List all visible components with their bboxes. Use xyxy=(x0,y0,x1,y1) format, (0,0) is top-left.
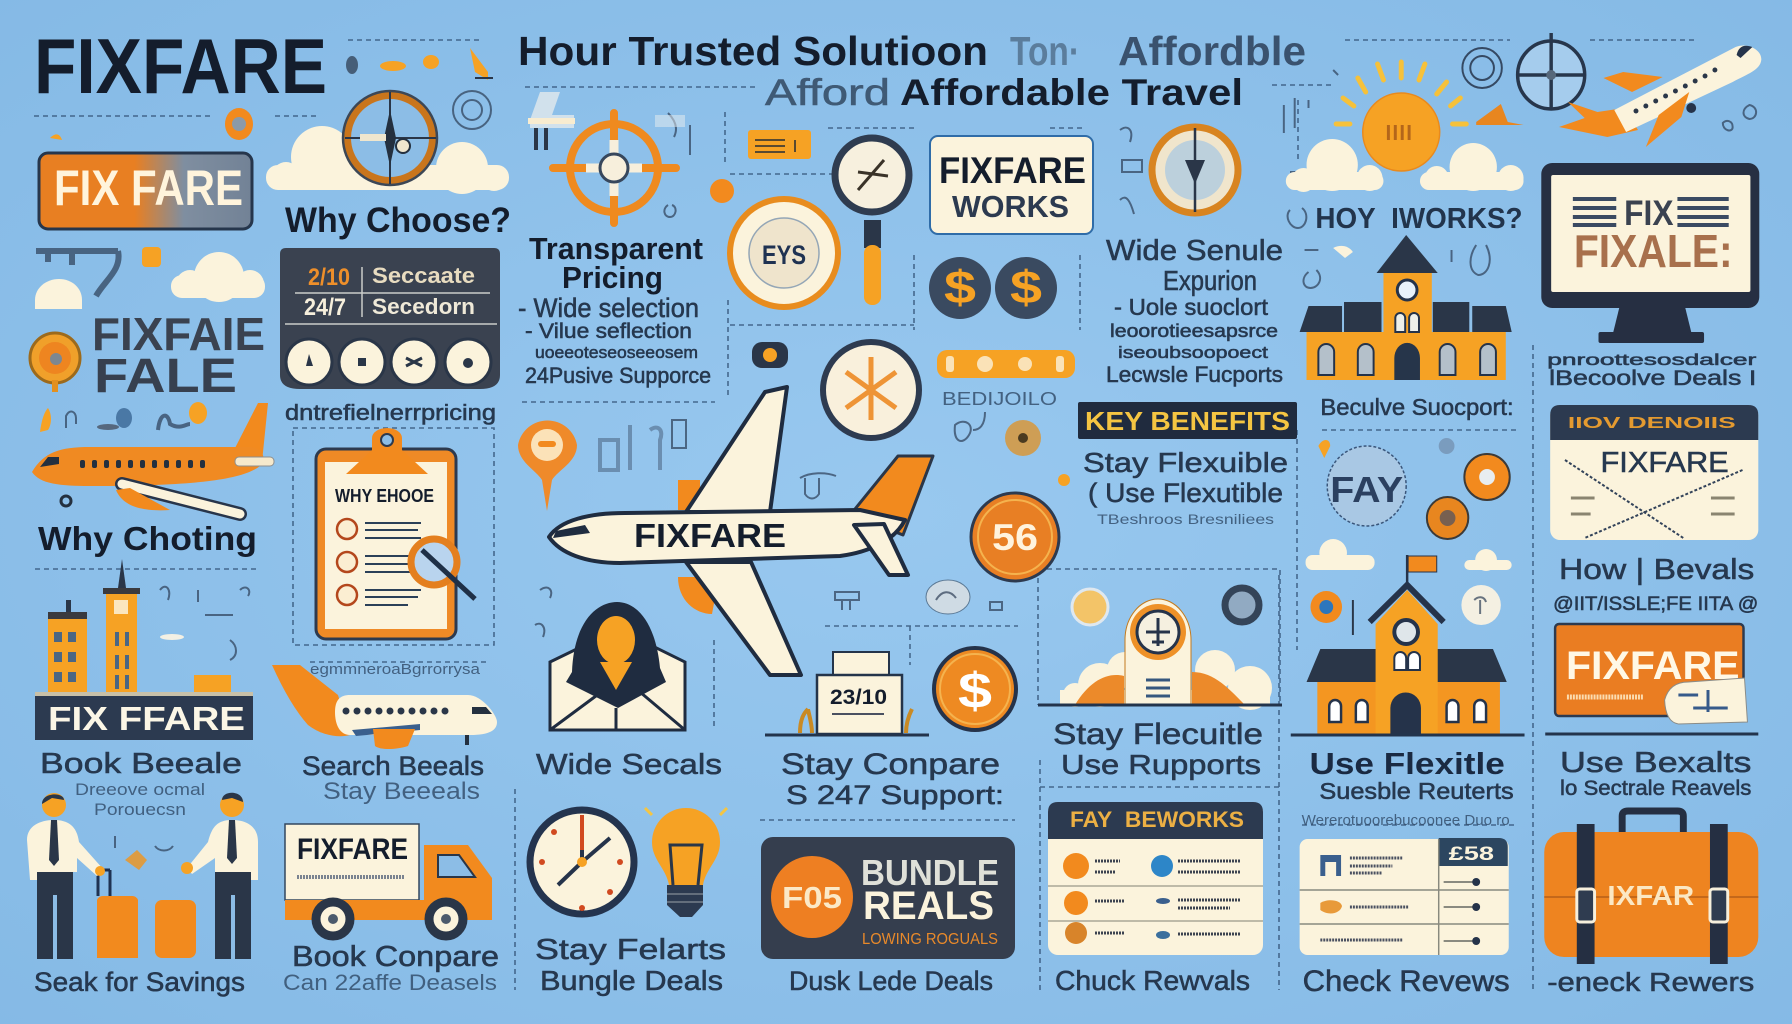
icons: dollar coins: $ xyxy=(1010,261,1042,313)
card: FAY BEWORKS table xyxy=(1048,802,1263,955)
label: Beculve Suocport: Beculve Suocport: xyxy=(1320,394,1514,420)
card: price table: £58 xyxy=(1449,843,1494,864)
badge: 56 coin xyxy=(971,493,1059,581)
airplane: top right xyxy=(1559,45,1761,147)
icon: magnifying glass xyxy=(835,138,909,305)
icon: orange ticket xyxy=(748,130,811,159)
text: Stay Flexuible: Stay Flexuible xyxy=(1083,447,1288,478)
illustration: school house xyxy=(1291,539,1525,735)
card: BUNDLE REALS: BUNDLE xyxy=(861,852,999,893)
panel: dark stats: Seccaate xyxy=(372,263,475,288)
cloud with compass xyxy=(266,91,509,194)
text: Stay Flecuitle: Stay Flecuitle xyxy=(1053,718,1263,751)
brand logo: FIXFARE: FIXFARE xyxy=(34,22,327,110)
text: Becoolve Deals xyxy=(1547,352,1757,390)
text: Search Beeals xyxy=(302,751,484,805)
panel: dark stats: 2/10 xyxy=(308,264,350,291)
text: Stay Felarts: Bungle Deals xyxy=(540,965,723,996)
icons: dollar coins xyxy=(929,257,1057,319)
icon: monitor xyxy=(1541,163,1759,343)
text: Wide Senule Expurion list: Wide Senule xyxy=(1106,235,1283,267)
central airplane: FIXFARE xyxy=(634,517,786,554)
text: Wide Senule Expurion list xyxy=(1106,235,1283,387)
text: Use Bexalts: lo Sectrale Reavels xyxy=(1560,777,1751,800)
text: Transparent Pricing list: - Vilue seflection xyxy=(525,320,692,343)
icon: orange suitcase: IXFAR xyxy=(1607,880,1694,911)
text: Book Conpare: Can 22affe Deasels xyxy=(283,970,497,995)
orange FIX FARE button: FIX FARE xyxy=(54,160,243,216)
illustration: town hall xyxy=(1300,235,1512,380)
badge: KEY BENEFITS: KEY BENEFITS xyxy=(1085,406,1290,436)
text: Use Flexible: Suesble Reuterts xyxy=(1319,778,1514,804)
text: How Bevals: How | Bevals xyxy=(1559,554,1754,586)
label: Seak for Savings: Seak for Savings xyxy=(34,967,245,997)
text: Use Flexible xyxy=(1302,746,1514,829)
left icon: towers and banner: FIX FFARE xyxy=(48,700,245,737)
icon: monitor: FIX xyxy=(1624,195,1673,233)
card: FIXFARE WORKS: WORKS xyxy=(952,189,1069,224)
text: Stay Flexuible: TBeshroos Bresniliees xyxy=(1097,511,1274,527)
left icon: towers and banner xyxy=(35,559,253,740)
label: FIXFAIE FALE: FIXFAIE xyxy=(92,308,265,360)
orange FIX FARE button xyxy=(39,153,252,229)
icon: sun with clouds xyxy=(1284,62,1524,192)
text: Stay Conpare: Stay Conpare xyxy=(781,748,1000,781)
label: FIXFAIE FALE xyxy=(92,308,265,403)
text: Becoolve Deals: lBecoolve Deals I xyxy=(1549,367,1756,390)
right columns group xyxy=(1284,33,1761,998)
panel: dark stats xyxy=(280,248,500,389)
text: Transparent Pricing list xyxy=(518,231,711,388)
text: Book Beeale xyxy=(40,748,242,819)
text: Book Conpare xyxy=(283,941,499,995)
icon: airport gate scene xyxy=(1038,588,1282,710)
doodle: chart tool xyxy=(36,251,119,296)
card: FAY BEWORKS table: FAY BEWORKS xyxy=(1070,807,1244,832)
text: Stay Flecuitle: Use Rupports xyxy=(1061,749,1261,780)
card: orange FIXFARE with ticket xyxy=(1545,624,1758,734)
icon: medal xyxy=(30,333,80,392)
text: Transparent Pricing list: Transparent xyxy=(529,231,703,266)
label: Wide Secals: Wide Secals xyxy=(536,749,722,781)
text: Transparent Pricing list: Pricing xyxy=(562,260,663,295)
label: Why Choting: Why Choting xyxy=(38,520,257,557)
card: FIXFARE WORKS xyxy=(930,136,1093,234)
text: Becoolve Deals: pnroottesosdalcer xyxy=(1547,352,1757,369)
text: Use Bexalts xyxy=(1560,747,1751,800)
text: Stay Conpare xyxy=(781,748,1004,810)
text: Use Bexalts: Use Bexalts xyxy=(1560,747,1751,779)
icon: crosshair xyxy=(1518,33,1585,109)
card: FIXFARE ticket xyxy=(1550,405,1758,540)
text: Transparent Pricing list: - Wide selection xyxy=(518,293,699,323)
icon: clipboard checklist: WHY EHOOE xyxy=(335,486,434,506)
text: Stay Flexuible: ( Use Flexutible xyxy=(1088,478,1283,508)
panel: dark stats: 24/7 xyxy=(304,294,346,321)
small icon row xyxy=(40,402,207,432)
card: BUNDLE REALS: REALS xyxy=(863,884,994,928)
card: FIXFARE ticket: IIOV DENOIIS xyxy=(1568,415,1736,432)
icon: compass right xyxy=(1120,127,1316,228)
clouds xyxy=(35,252,265,309)
text with icons: fedijoilo xyxy=(942,389,1057,456)
text: Wide Senule Expurion list: iseoubsoopoect xyxy=(1118,343,1268,362)
text: Stay Conpare: S 247 Support: xyxy=(786,780,1004,810)
label: HOY WORKS?: HOY IWORKS? xyxy=(1315,203,1523,235)
label: Chuck Rewvals: Chuck Rewvals xyxy=(1055,965,1250,996)
icon: star dial xyxy=(823,342,919,438)
text: Stay Flecuitle xyxy=(1053,718,1263,780)
icon: dollar coin xyxy=(934,648,1016,730)
card: BUNDLE REALS xyxy=(761,837,1015,959)
text: Transparent Pricing list: uoeeoteseoseeosem xyxy=(535,343,698,362)
text: Search Beeals: Stay Beeeals xyxy=(323,778,480,805)
card: price table xyxy=(1300,838,1509,955)
icons: dollar coins: $ xyxy=(944,261,976,313)
label: Check Revews: Check Revews xyxy=(1303,965,1510,998)
icon: light bulb xyxy=(645,808,727,917)
icon: wall clock xyxy=(530,810,634,914)
label: Check Rewers: -eneck Rewers xyxy=(1547,969,1754,997)
central airplane xyxy=(549,387,933,675)
icon: woman in envelope xyxy=(535,588,685,730)
text: Wide Senule Expurion list: Expurion xyxy=(1163,265,1257,296)
doodles near plane xyxy=(600,420,1070,614)
text: Stay Flexuible xyxy=(1083,447,1288,527)
label: FIXFAIE FALE: FALE xyxy=(94,350,237,403)
text: Wide Senule Expurion list: - Uole suoclort xyxy=(1114,294,1269,320)
text: pricing: dntrefielnerrpricing xyxy=(285,400,496,425)
icon: delivery truck: FIXFARE xyxy=(297,833,408,866)
text: Wide Senule Expurion list: Lecwsle Fucports xyxy=(1106,362,1283,387)
icon: orange suitcase xyxy=(1544,811,1758,964)
card: FIXFARE WORKS: FIXFARE xyxy=(939,150,1086,191)
title: Affordble xyxy=(1118,28,1306,74)
icon: EYS badge xyxy=(730,199,838,307)
icon: calendar document xyxy=(765,652,929,735)
text: Wide Senule Expurion list: leoorotieesapsrce xyxy=(1110,321,1278,341)
title: Affordable Travel xyxy=(900,72,1243,113)
card: BUNDLE REALS: LOWING ROGUALS xyxy=(862,931,998,948)
text: Stay Felarts: Stay Felarts xyxy=(535,934,726,966)
card: orange FIXFARE with ticket: FIXFARE xyxy=(1566,644,1740,688)
icon: target spiral xyxy=(1462,48,1502,88)
icon: FAY badge with coins xyxy=(1318,438,1510,539)
title: Afford xyxy=(765,72,890,113)
faded label above plane: egmmneroaBgrrorrysa xyxy=(310,661,481,678)
icon: small coin xyxy=(225,108,253,140)
icon: dollar coin: $ xyxy=(958,663,992,719)
panel: dark stats: Secedorn xyxy=(372,294,475,319)
icon: calendar document: 23/10 xyxy=(830,686,887,709)
small doodle icons xyxy=(50,48,493,140)
icon: FAY badge with coins: FAY xyxy=(1330,470,1403,510)
card: BUNDLE REALS: F05 xyxy=(782,880,842,915)
pill: orange badge strip xyxy=(937,350,1075,378)
text: Stay Felarts xyxy=(535,934,726,996)
airplane: white and orange xyxy=(272,665,497,749)
card: FIXFARE ticket: FIXFARE xyxy=(1600,447,1729,479)
icon: EYS badge: EYS xyxy=(762,240,806,270)
badge: KEY BENEFITS xyxy=(1078,402,1297,439)
text: Transparent Pricing list: 24Pusive Supporce xyxy=(525,363,711,388)
orange airplane xyxy=(32,403,274,514)
text: Book Beeale: Book Beeale xyxy=(40,748,242,780)
icon: small doodles middle xyxy=(655,113,788,368)
title: Ton· xyxy=(1010,28,1080,74)
icon: globe doodle xyxy=(453,91,491,129)
icon: ship helm xyxy=(553,113,676,223)
text with icons: fedijoilo: BEDIJOILO xyxy=(942,389,1057,409)
badge: 56 coin: 56 xyxy=(992,517,1038,558)
icon: delivery truck xyxy=(285,824,492,936)
icon: monitor: FIXALE: xyxy=(1574,226,1733,277)
title: Hour Trusted Solutioon xyxy=(518,28,988,74)
label: Dusk Lede Deals: Dusk Lede Deals xyxy=(789,966,993,996)
icon: orange tag xyxy=(142,247,161,267)
icon: location pin xyxy=(518,420,577,511)
text: Book Beeale: Porouecsn xyxy=(94,800,186,819)
text: Search Beeals: Search Beeals xyxy=(302,751,484,781)
title xyxy=(518,28,1306,113)
text: Use Flexible: Use Flexitle xyxy=(1309,746,1505,781)
text: Book Conpare: Book Conpare xyxy=(292,941,499,973)
text: Use Flexible: Wererotuoorebucoonee Duo ro xyxy=(1302,813,1510,829)
illustration: travellers with luggage xyxy=(27,793,258,959)
icon: seat doodle xyxy=(528,92,575,150)
icon: clipboard checklist xyxy=(316,428,475,639)
text: Book Beeale: Dreeove ocmal xyxy=(75,780,205,799)
heading: Why Choose?: Why Choose? xyxy=(285,201,511,240)
text: How Bevals xyxy=(1553,554,1758,614)
text: How Bevals: @IIT/ISSLE;FE IITA @ xyxy=(1553,593,1758,614)
